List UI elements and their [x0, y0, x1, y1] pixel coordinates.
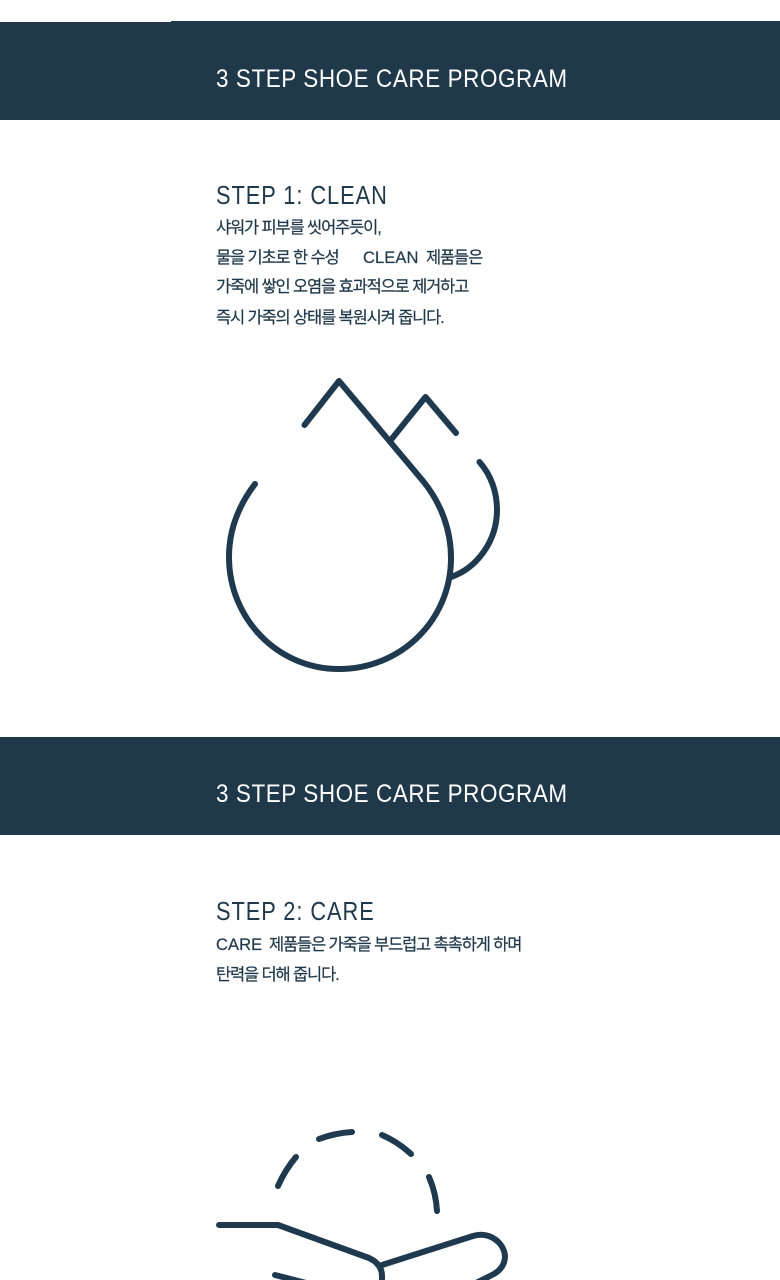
banner title: 3 STEP SHOE CARE PROGRAM — [216, 780, 568, 808]
step 1 description: CLEAN — [363, 249, 419, 267]
banner title: 3 STEP SHOE CARE PROGRAM — [216, 65, 568, 93]
small drop — [390, 397, 497, 577]
line 2 — [216, 249, 483, 267]
large drop — [229, 381, 451, 669]
dashed circle — [278, 1132, 437, 1211]
line 1: 샤워가 피부를 씻어주듯이, — [216, 219, 381, 237]
line 3: 가죽에 쌓인 오염을 효과적으로 제거하고 — [216, 278, 468, 296]
second banner — [0, 737, 780, 835]
line 2: 물을 기초로 한 수성 — [216, 249, 339, 267]
heading: step 2: STEP 2: CARE — [216, 898, 375, 926]
line 4: 즉시 가죽의 상태를 복원시켜 줍니다. — [216, 309, 444, 327]
step 2 description — [216, 936, 521, 984]
banner extension — [171, 21, 780, 22]
line 2: 탄력을 더해 줍니다. — [216, 966, 339, 984]
heading: step 1: STEP 1: CLEAN — [216, 182, 388, 210]
line 1: CARE — [216, 936, 262, 954]
hand — [219, 1225, 505, 1280]
step 1 description: 제품들은 — [426, 249, 482, 267]
step 2 description: 제품들은 가죽을 부드럽고 촉촉하게 하며 — [269, 936, 521, 954]
top banner — [0, 22, 780, 120]
line 1 — [216, 936, 521, 954]
step 1 description — [216, 219, 483, 327]
